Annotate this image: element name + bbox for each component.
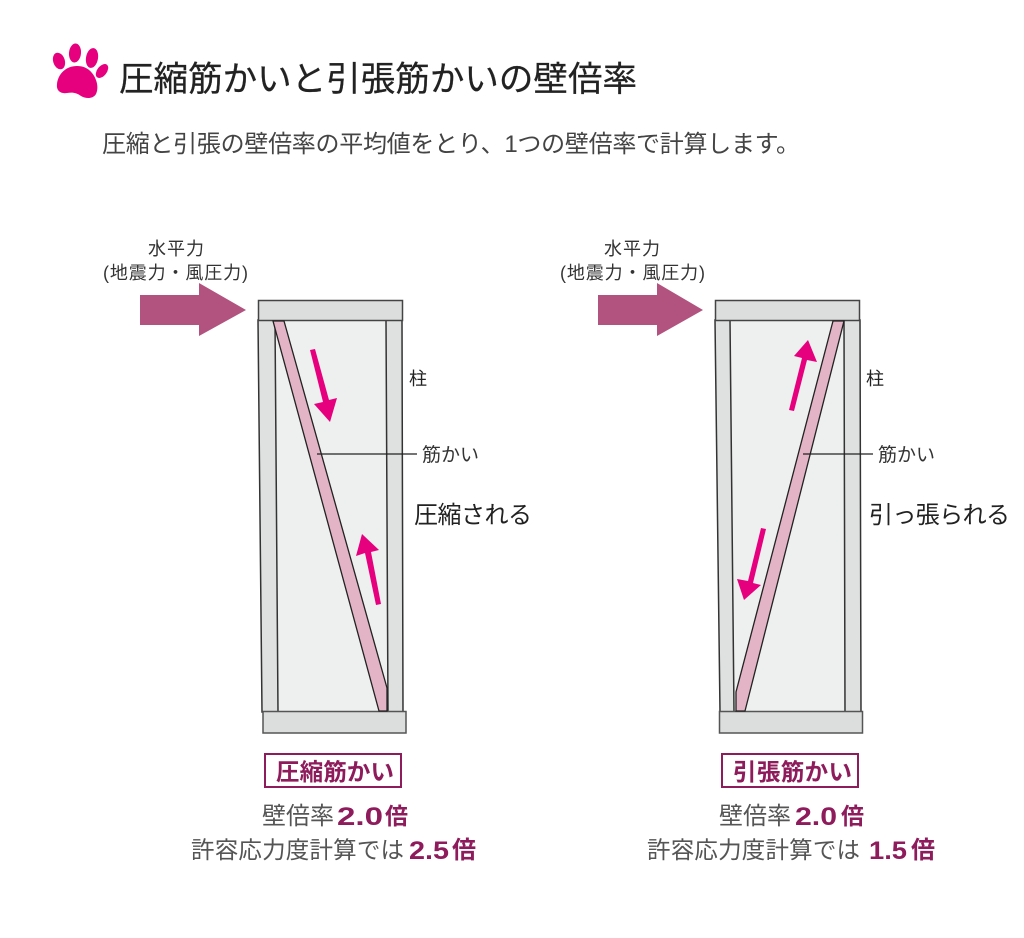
compression label: 圧縮される [414,502,532,529]
wall ratio: 2.0 [337,803,383,831]
horizontal force label: 水平力 [148,239,204,259]
panel: tension brace [560,239,1010,865]
arrow: downward compression [310,349,337,422]
tag: 引張筋かい [733,759,852,785]
horizontal force label: (地震力・風圧力) [103,263,248,283]
wall ratio: 壁倍率 [262,803,334,830]
horizontal force label [103,239,248,283]
brace [736,321,844,711]
wall frame [715,300,862,733]
tension label: 引っ張られる [869,502,1010,529]
allowable stress ratio: 倍 [452,837,476,864]
allowable stress ratio [647,837,935,865]
tag [722,754,858,787]
tag: 圧縮筋かい [276,759,394,785]
brace [273,321,387,711]
leader line [317,453,417,455]
subtitle text: 圧縮と引張の壁倍率の平均値をとり、1つの壁倍率で計算します。 [102,131,800,158]
arrow: horizontal force [598,283,703,336]
wall ratio: 倍 [385,803,408,829]
arrow: horizontal force [140,283,246,336]
brace label: 筋かい [878,444,935,466]
panel: compression brace [103,239,532,865]
wall frame [258,300,406,733]
allowable stress ratio: 許容応力度計算では [647,837,860,863]
arrow: upward compression [356,534,381,605]
wall ratio: 2.0 [795,803,837,831]
brace label: 筋かい [422,444,479,466]
arrow: downward tension [737,528,766,600]
icon: pink paw [51,43,111,98]
wall ratio: 倍 [841,803,864,829]
horizontal force label [560,239,705,283]
wall ratio [719,803,864,831]
wall ratio [262,803,408,831]
allowable stress ratio: 倍 [911,837,935,864]
horizontal force label: 水平力 [604,239,660,259]
title: 圧縮筋かいと引張筋かいの壁倍率 [119,61,637,99]
horizontal force label: (地震力・風圧力) [560,263,705,283]
allowable stress ratio: 許容応力度計算では [191,837,404,863]
allowable stress ratio: 2.5 [409,837,449,865]
arrow: upward tension [789,340,817,411]
leader line [803,453,873,455]
column label: 柱 [866,369,884,389]
allowable stress ratio: 1.5 [869,837,907,865]
column label: 柱 [409,369,427,389]
tag [265,754,401,787]
wall ratio: 壁倍率 [719,803,791,830]
allowable stress ratio [191,837,476,865]
